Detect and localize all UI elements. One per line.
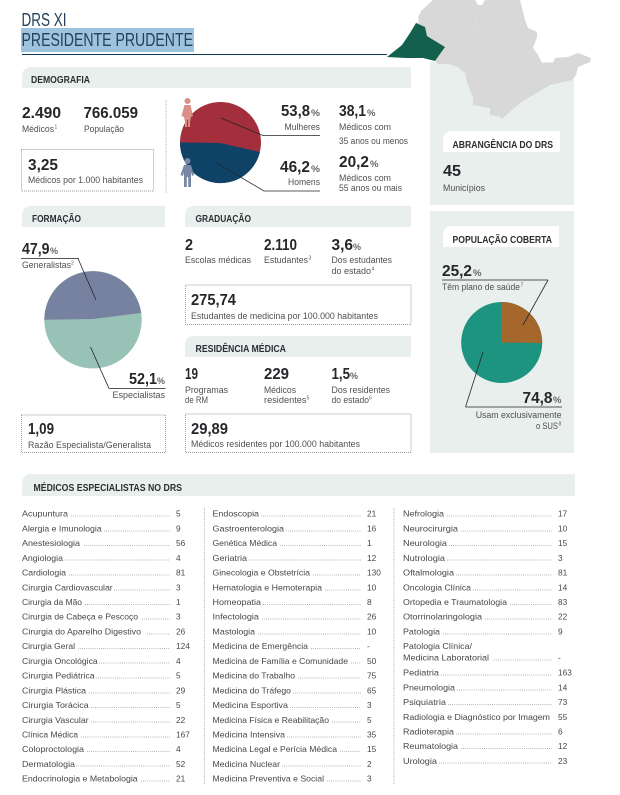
- stat: homens: %: [311, 164, 321, 175]
- list: especialidades coluna 3: Oftalmologia: [403, 568, 454, 578]
- list: especialidades coluna 1: Acupuntura: [22, 509, 68, 519]
- list: especialidades coluna 1: [22, 509, 190, 784]
- stat: médicos: 2.490: [22, 105, 61, 122]
- list: especialidades coluna 1: 3: [176, 582, 181, 592]
- stat: população: 766.059: [84, 105, 138, 122]
- stat: programas de RM: 19: [185, 366, 198, 383]
- list: especialidades coluna 1: 5: [176, 700, 181, 710]
- list: especialidades coluna 1: Cirurgia de Cabeça e Pescoço: [22, 612, 138, 622]
- list: especialidades coluna 1: Coloproctologia: [22, 744, 84, 754]
- stat: médicos: 1: [54, 124, 58, 130]
- list: especialidades coluna 3: Ortopedia e Traumatologia: [403, 597, 507, 607]
- stat: médicos residentes: Médicos: [264, 385, 297, 395]
- list: especialidades coluna 2: Medicina do Tráfego: [212, 685, 291, 695]
- list: especialidades coluna 1: 3: [176, 612, 181, 622]
- stat: médicos com 35 anos ou menos: [339, 103, 409, 146]
- list: especialidades coluna 1: 4: [176, 744, 181, 754]
- stat: programas de RM: [185, 366, 229, 405]
- callout: razão especialista/generalista: 1,09: [28, 421, 54, 438]
- list: especialidades coluna 2: 3: [367, 774, 372, 784]
- stat: estudantes: [264, 237, 312, 265]
- heading: formação: [22, 206, 165, 227]
- callout: estudantes por 100.000 habitantes: 275,74: [191, 292, 236, 309]
- list: especialidades coluna 2: Medicina Física e Reabilitação: [212, 715, 329, 725]
- list: especialidades coluna 1: Cirurgia Torácica: [22, 700, 89, 710]
- list: especialidades coluna 3: 23: [558, 756, 568, 766]
- stat: dos estudantes do estado: [332, 237, 393, 276]
- list: especialidades coluna 1: Endocrinologia e Metabologia: [22, 774, 138, 784]
- list: especialidades coluna 2: Genética Médica: [212, 538, 277, 548]
- stat: dos residentes do estado: do estado: [332, 395, 369, 405]
- callout: residentes por 100.000 habitantes: 29,89: [191, 421, 228, 438]
- stat: generalistas: %: [50, 246, 59, 257]
- stat: programas de RM: de RM: [185, 395, 208, 405]
- stat: plano de saúde: 25,2: [442, 263, 472, 280]
- list: especialidades coluna 3: 10: [558, 523, 568, 533]
- list: especialidades coluna 1: 4: [176, 656, 181, 666]
- panel: formação: [21, 206, 166, 452]
- stat: dos estudantes do estado: 3,6: [332, 237, 353, 254]
- stat: dos estudantes do estado: Dos estudantes: [332, 255, 393, 265]
- list: especialidades coluna 1: Cirurgia Cardiovascular: [22, 582, 113, 592]
- list: especialidades coluna 3: Radioterapia: [403, 726, 454, 736]
- stat: médicos: Médicos: [22, 124, 55, 134]
- list: especialidades coluna 1: Angiologia: [22, 553, 63, 563]
- stat: médicos residentes: 229: [264, 366, 289, 383]
- heading: população coberta: POPULAÇÃO COBERTA: [452, 233, 552, 246]
- stat: estudantes: 3: [308, 256, 312, 262]
- stat: mulheres: Mulheres: [284, 122, 321, 132]
- list: especialidades coluna 1: 5: [176, 671, 181, 681]
- heading: demografia: [22, 67, 411, 88]
- list: especialidades coluna 2: Medicina Nuclear: [212, 759, 280, 769]
- stat: médicos com 55 anos ou mais: [339, 154, 403, 193]
- list: especialidades coluna 2: 12: [367, 553, 377, 563]
- list: especialidades coluna 1: Cirurgia Oncológica: [22, 656, 98, 666]
- list: especialidades coluna 2: 5: [367, 715, 372, 725]
- callout: médicos por 1.000 habitantes: Médicos por 1.000 habitantes: [28, 175, 144, 185]
- list: especialidades coluna 1: Cirurgia da Mão: [22, 597, 82, 607]
- list: especialidades coluna 2: Medicina Esportiva: [212, 700, 288, 710]
- stat: dos residentes do estado: [332, 366, 391, 405]
- list: especialidades coluna 2: 8: [367, 597, 372, 607]
- stat: dos estudantes do estado: 4: [372, 266, 374, 272]
- list: especialidades coluna 3: Urologia: [403, 756, 437, 766]
- stat: programas de RM: Programas: [185, 385, 229, 395]
- callout: estudantes por 100.000 habitantes: [186, 285, 411, 324]
- list: especialidades coluna 3: 15: [558, 538, 568, 548]
- list: especialidades coluna 3: 22: [558, 612, 568, 622]
- stat: médicos residentes: [264, 366, 310, 405]
- list: especialidades coluna 3: 17: [558, 509, 568, 519]
- stat: plano de saúde: [442, 263, 548, 292]
- heading: formação: FORMAÇÃO: [32, 212, 81, 225]
- stat: generalistas: Generalistas: [22, 260, 72, 270]
- list: especialidades coluna 2: Endoscopia: [212, 509, 259, 519]
- stat: plano de saúde: Têm plano de saúde: [442, 282, 520, 292]
- stat: exclusivamente SUS: 8: [558, 422, 562, 428]
- stat: médicos com 35 anos ou menos: 38,1: [339, 103, 366, 120]
- list: especialidades coluna 2: 21: [367, 509, 377, 519]
- list: especialidades coluna 1: 4: [176, 553, 181, 563]
- list: especialidades coluna 1: Cirurgia Plástica: [22, 685, 86, 695]
- callout: residentes por 100.000 habitantes: [186, 414, 411, 452]
- list: especialidades coluna 2: 75: [367, 671, 377, 681]
- stat: escolas médicas: [185, 237, 252, 265]
- list: especialidades coluna 1: Cirurgia Vascular: [22, 715, 89, 725]
- list: especialidades coluna 3: 14: [558, 682, 568, 692]
- stat: especialistas: [109, 371, 166, 400]
- callout: médicos por 1.000 habitantes: [22, 150, 154, 191]
- stat: médicos com 55 anos ou mais: 20,2: [339, 154, 369, 171]
- list: especialidades coluna 1: 21: [176, 774, 186, 784]
- list: especialidades coluna 3: 163: [558, 668, 572, 678]
- list: especialidades coluna 2: [212, 509, 381, 784]
- stat: médicos com 35 anos ou menos: %: [367, 108, 376, 119]
- title line 1: DRS XI: [22, 10, 66, 30]
- stat: especialistas: 52,1: [129, 371, 157, 388]
- list: especialidades coluna 3: Otorrinolaringologia: [403, 612, 482, 622]
- list: especialidades coluna 3: Nutrologia: [403, 553, 445, 563]
- list: especialidades coluna 2: Hematologia e Hemoterapia: [212, 582, 322, 592]
- stat: exclusivamente SUS: %: [553, 395, 562, 406]
- list: especialidades coluna 1: 22: [176, 715, 186, 725]
- callout: estudantes por 100.000 habitantes: Estudantes de medicina por 100.000 habitantes: [191, 311, 379, 321]
- stat: população: População: [84, 124, 124, 134]
- list: especialidades coluna 3: Neurologia: [403, 538, 447, 548]
- panel: abrangência background: [430, 62, 574, 205]
- stat: generalistas: 2: [71, 260, 74, 266]
- heading: graduação: GRADUAÇÃO: [196, 212, 251, 225]
- list: especialidades coluna 2: Ginecologia e Obstetrícia: [212, 568, 310, 578]
- list: especialidades coluna 3: Reumatologia: [403, 741, 458, 751]
- stat: médicos: [22, 105, 61, 134]
- panel: graduação: [185, 206, 411, 324]
- list: especialidades coluna 2: 50: [367, 656, 377, 666]
- heading: médicos especialistas no DRS: [22, 474, 575, 496]
- list: especialidades coluna 2: 3: [367, 700, 372, 710]
- stat: exclusivamente SUS: o SUS: [536, 421, 558, 431]
- panel: médicos especialistas: [22, 474, 575, 785]
- list: especialidades coluna 2: Medicina Legal e Perícia Médica: [212, 744, 337, 754]
- list: especialidades coluna 3: Medicina Laboratorial: [403, 653, 489, 663]
- stat: dos residentes do estado: %: [350, 371, 359, 382]
- list: especialidades coluna 2: 2: [367, 759, 372, 769]
- list: especialidades coluna 1: 124: [176, 641, 190, 651]
- heading: demografia: DEMOGRAFIA: [31, 74, 90, 86]
- stat: exclusivamente SUS: Usam exclusivamente: [476, 410, 562, 420]
- title rule: [22, 54, 387, 56]
- panel: população coberta: [430, 211, 574, 453]
- list: especialidades coluna 1: 52: [176, 759, 186, 769]
- list: especialidades coluna 2: 10: [367, 626, 377, 636]
- title: [21, 10, 194, 52]
- stat: médicos com 55 anos ou mais: %: [370, 159, 379, 170]
- stat: municípios: [443, 163, 486, 193]
- stat: plano de saúde: %: [473, 268, 482, 279]
- chart: coverage pie: [461, 280, 548, 407]
- stat: municípios: Municípios: [443, 183, 486, 193]
- stat: mulheres: %: [311, 108, 321, 119]
- stat: exclusivamente SUS: [466, 390, 562, 431]
- list: especialidades coluna 3: 81: [558, 568, 568, 578]
- callout: médicos por 1.000 habitantes: 3,25: [28, 157, 58, 174]
- list: especialidades coluna 2: Medicina Intensiva: [212, 730, 285, 740]
- list: especialidades coluna 2: 10: [367, 582, 377, 592]
- chart: formação pie: [44, 258, 142, 388]
- title line 2: PRESIDENTE PRUDENTE: [22, 30, 193, 50]
- stat: homens: Homens: [288, 177, 321, 187]
- stat: especialistas: %: [157, 376, 166, 387]
- list: especialidades coluna 3: Nefrologia: [403, 509, 444, 519]
- stat: dos estudantes do estado: %: [353, 242, 362, 253]
- list: especialidades coluna 1: 1: [176, 597, 181, 607]
- stat: médicos residentes: 5: [306, 396, 310, 402]
- list: especialidades coluna 2: Mastologia: [212, 626, 255, 636]
- heading: população coberta: [443, 226, 559, 247]
- list: especialidades coluna 3: 9: [558, 626, 563, 636]
- list: especialidades coluna 2: Infectologia: [212, 612, 259, 622]
- panel: residência médica: [185, 336, 411, 452]
- list: especialidades coluna 3: Neurocirurgia: [403, 523, 458, 533]
- heading: médicos especialistas no DRS: MÉDICOS ESPECIALISTAS NO DRS: [34, 481, 182, 494]
- stat: especialistas: Especialistas: [112, 390, 166, 400]
- stat: médicos com 55 anos ou mais: Médicos com: [339, 173, 391, 183]
- list: especialidades coluna 3: Patologia Clínica/: [403, 641, 473, 651]
- stat: estudantes: 2.110: [264, 237, 297, 254]
- list: especialidades coluna 2: 130: [367, 568, 381, 578]
- stat: escolas médicas: 2: [185, 237, 193, 254]
- list: especialidades coluna 3: Pneumologia: [403, 682, 455, 692]
- list: especialidades coluna 3: 83: [558, 597, 568, 607]
- list: especialidades coluna 2: 15: [367, 744, 377, 754]
- list: especialidades coluna 2: 26: [367, 612, 377, 622]
- list: especialidades coluna 2: 65: [367, 685, 377, 695]
- stat: generalistas: 47,9: [22, 241, 50, 258]
- list: especialidades coluna 1: 9: [176, 523, 181, 533]
- list: especialidades coluna 2: 35: [367, 730, 377, 740]
- stat: médicos com 35 anos ou menos: Médicos com: [339, 122, 391, 132]
- list: especialidades coluna 1: 167: [176, 730, 190, 740]
- list: especialidades coluna 2: 1: [367, 538, 372, 548]
- icon: woman: [182, 98, 193, 127]
- stat: estudantes: Estudantes: [264, 255, 309, 265]
- stat: dos residentes do estado: 1,5: [332, 366, 350, 383]
- list: especialidades coluna 1: Anestesiologia: [22, 538, 80, 548]
- map: highlighted region: [387, 23, 445, 61]
- list: especialidades coluna 1: Dermatologia: [22, 759, 75, 769]
- list: especialidades coluna 3: Pediatria: [403, 668, 439, 678]
- list: especialidades coluna 3: 6: [558, 726, 563, 736]
- list: especialidades coluna 3: 73: [558, 697, 568, 707]
- list: especialidades coluna 2: Medicina do Trabalho: [212, 671, 295, 681]
- list: especialidades coluna 1: Cardiologia: [22, 568, 66, 578]
- list: especialidades coluna 1: Clínica Médica: [22, 730, 78, 740]
- list: especialidades coluna 1: 81: [176, 568, 186, 578]
- list: especialidades coluna 2: Gastroenterologia: [212, 523, 284, 533]
- list: especialidades coluna 1: 5: [176, 509, 181, 519]
- callout: residentes por 100.000 habitantes: Médicos residentes por 100.000 habitantes: [191, 439, 361, 449]
- list: especialidades coluna 2: Homeopatia: [212, 597, 261, 607]
- stat: mulheres: [281, 103, 321, 132]
- list: especialidades coluna 3: [403, 509, 572, 766]
- heading: abrangência: ABRANGÊNCIA DO DRS: [452, 138, 553, 151]
- stat: dos residentes do estado: Dos residentes: [332, 385, 391, 395]
- stat: homens: [280, 159, 321, 187]
- stat: municípios: 45: [443, 163, 461, 180]
- stat: dos estudantes do estado: do estado: [332, 266, 371, 276]
- list: especialidades coluna 3: 3: [558, 553, 563, 563]
- panel: demografia: [22, 67, 411, 193]
- list: especialidades coluna 3: 14: [558, 582, 568, 592]
- list: especialidades coluna 2: Medicina Preventiva e Social: [212, 774, 324, 784]
- list: especialidades coluna 1: Cirurgia do Aparelho Digestivo: [22, 626, 141, 636]
- stat: médicos com 35 anos ou menos: 35 anos ou menos: [339, 136, 409, 146]
- map: state outline: [416, 0, 591, 119]
- list: especialidades coluna 2: Geriatria: [212, 553, 247, 563]
- stat: população: [84, 105, 138, 134]
- stat: exclusivamente SUS: 74,8: [522, 390, 553, 407]
- stat: mulheres: 53,8: [281, 103, 310, 120]
- heading: residência médica: RESIDÊNCIA MÉDICA: [196, 342, 286, 355]
- stat: médicos residentes: residentes: [264, 395, 307, 405]
- list: especialidades coluna 1: Cirurgia Geral: [22, 641, 75, 651]
- list: especialidades coluna 3: 12: [558, 741, 568, 751]
- panel: abrangência do DRS: [443, 131, 560, 193]
- stat: homens: 46,2: [280, 159, 310, 176]
- list: especialidades coluna 1: 26: [176, 626, 186, 636]
- list: especialidades coluna 3: Oncologia Clínica: [403, 582, 471, 592]
- icon: man: [180, 158, 194, 187]
- list: especialidades coluna 3: Radiologia e Diagnóstico por Imagem: [403, 712, 550, 722]
- chart: gender pie: [180, 102, 320, 191]
- list: especialidades coluna 1: 29: [176, 685, 186, 695]
- list: especialidades coluna 2: -: [367, 641, 370, 651]
- title highlight: [21, 28, 194, 52]
- heading: graduação: [185, 206, 411, 227]
- list: especialidades coluna 3: Patologia: [403, 626, 440, 636]
- list: especialidades coluna 2: Medicina de Família e Comunidade: [212, 656, 348, 666]
- list: especialidades coluna 3: -: [558, 653, 561, 663]
- stat: plano de saúde: 7: [520, 282, 524, 288]
- stat: generalistas: [21, 241, 79, 270]
- list: especialidades coluna 3: Psiquiatria: [403, 697, 446, 707]
- list: especialidades coluna 3: 55: [558, 712, 568, 722]
- stat: dos residentes do estado: 6: [369, 396, 372, 402]
- map: São Paulo state with DRS XI highlighted: [387, 0, 591, 119]
- callout: razão especialista/generalista: [22, 415, 166, 452]
- list: especialidades coluna 2: Medicina de Emergência: [212, 641, 308, 651]
- heading: residência médica: [185, 336, 411, 357]
- list: especialidades coluna 1: Alergia e Imunologia: [22, 523, 102, 533]
- callout: razão especialista/generalista: Razão Especialista/Generalista: [28, 440, 151, 450]
- list: especialidades coluna 1: Cirurgia Pediátrica: [22, 671, 95, 681]
- stat: escolas médicas: Escolas médicas: [185, 255, 252, 265]
- list: especialidades coluna 1: 56: [176, 538, 186, 548]
- stat: médicos com 55 anos ou mais: 55 anos ou mais: [339, 183, 403, 193]
- list: especialidades coluna 2: 16: [367, 523, 377, 533]
